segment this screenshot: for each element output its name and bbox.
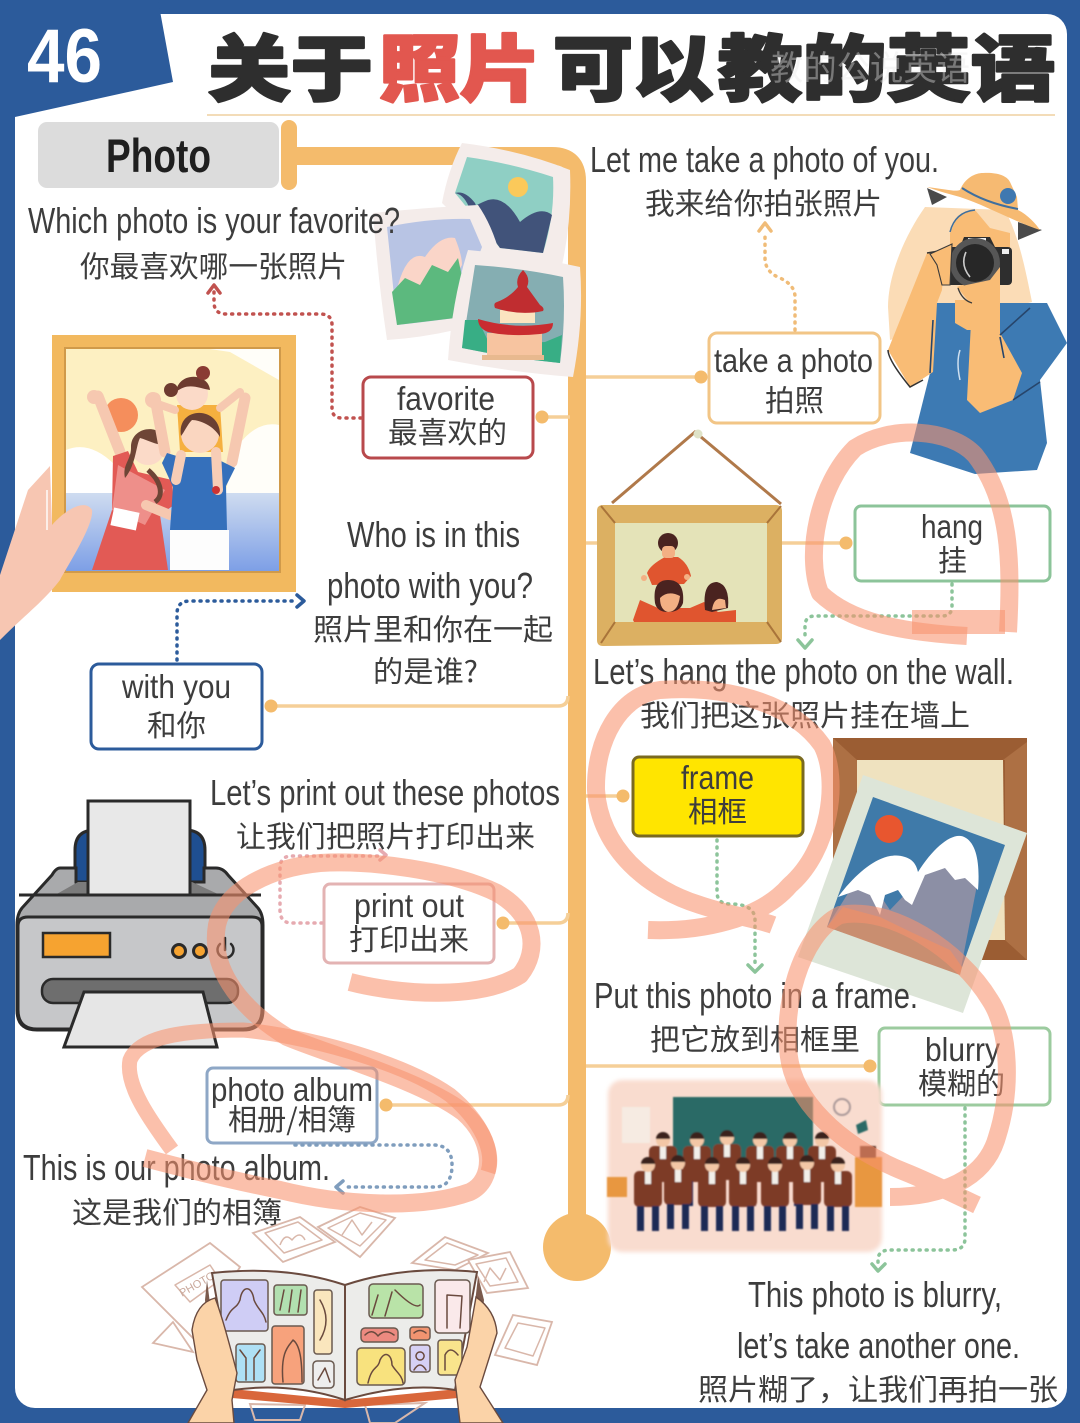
callout: print out: print out bbox=[354, 887, 464, 924]
title bbox=[208, 11, 1055, 116]
text: Let's print out bbox=[210, 772, 560, 856]
highlight scribble: print out and album bbox=[129, 862, 532, 1204]
text: Who is in this photo: photo with you? bbox=[327, 565, 533, 606]
title: 照片 bbox=[379, 11, 541, 116]
callout: photo album: 相册/相簿 bbox=[228, 1097, 356, 1139]
camera bbox=[942, 237, 1012, 288]
text: This is our photo album bbox=[23, 1147, 330, 1232]
callout: favorite: favorite bbox=[397, 380, 495, 417]
arrow: take a photo to sentence bbox=[759, 223, 795, 330]
illustration: blurry class photo bbox=[607, 1080, 882, 1252]
callout: print out bbox=[324, 884, 494, 963]
callout: with you bbox=[91, 664, 262, 749]
arrow: favorite to sentence bbox=[208, 285, 361, 418]
callout: blurry bbox=[879, 1028, 1050, 1105]
callout: frame: 相框 bbox=[688, 789, 747, 831]
callout: photo album: photo album bbox=[211, 1071, 373, 1108]
illustration: family photo with hand bbox=[0, 335, 296, 640]
illustration: printer bbox=[17, 801, 263, 1047]
text: Let's print out: 让我们把照片打印出来 bbox=[236, 814, 535, 856]
callout: hang: hang bbox=[921, 508, 983, 545]
central timeline trunk bbox=[281, 120, 611, 1281]
heading: Photo: Photo bbox=[106, 129, 211, 182]
callout: hang bbox=[855, 506, 1050, 581]
highlight scribble: hang bbox=[814, 433, 1009, 636]
illustration: wooden frame bbox=[833, 738, 1027, 960]
text: Put this photo in a frame: Put this photo in a frame. bbox=[594, 975, 918, 1016]
illustration: stack of photos bbox=[373, 143, 581, 377]
text: This photo is blurry: 照片糊了，让我们再拍一张 bbox=[698, 1367, 1058, 1409]
text: Let me take a photo bbox=[590, 139, 939, 223]
illustration: hanging framed picture bbox=[597, 430, 782, 646]
branch connectors bbox=[264, 370, 876, 1112]
text: Which photo: 你最喜欢哪一张照片 bbox=[80, 244, 347, 286]
arrow: with you to sentence bbox=[177, 595, 304, 660]
text: Who is in this photo: 照片里和你在一起 bbox=[313, 607, 553, 649]
highlight scribble: frame bbox=[596, 689, 831, 930]
text: This is our photo album: This is our photo album. bbox=[23, 1147, 330, 1188]
text: Let's hang the photo bbox=[593, 651, 1014, 735]
hand bbox=[0, 466, 92, 640]
callout: frame: frame bbox=[681, 759, 754, 796]
text: Let's print out: Let’s print out these photos bbox=[210, 772, 560, 813]
text: Who is in this photo: Who is in this bbox=[347, 514, 520, 555]
text: Let me take a photo: 我来给你拍张照片 bbox=[645, 181, 882, 223]
illustration: woman with camera bbox=[888, 173, 1067, 474]
text: This is our photo album: 这是我们的相簿 bbox=[72, 1190, 282, 1232]
text: Put this photo in a frame bbox=[594, 975, 918, 1059]
text: This photo is blurry: let’s take another one. bbox=[737, 1325, 1020, 1366]
number tab bbox=[0, 0, 173, 140]
callout: favorite bbox=[363, 377, 533, 458]
arrow: print out to sentence bbox=[280, 850, 386, 923]
title: 可以 bbox=[553, 11, 713, 116]
heading: Photo bbox=[38, 122, 279, 188]
hands bbox=[188, 1298, 237, 1423]
man and child bbox=[145, 366, 245, 570]
sun hat bbox=[927, 173, 1042, 240]
arrow: frame to sentence bbox=[717, 840, 762, 972]
text: Who is in this photo: 的是谁? bbox=[373, 649, 478, 691]
callout: frame bbox=[633, 757, 803, 836]
callout: hang: 挂 bbox=[938, 538, 967, 580]
title: 关于 bbox=[208, 11, 373, 116]
callout: with you: with you bbox=[121, 668, 231, 705]
woman bbox=[87, 390, 174, 570]
callout: take a photo bbox=[709, 333, 880, 423]
illustration: photo album with hands bbox=[142, 1207, 552, 1423]
text: Put this photo in a frame: 把它放到相框里 bbox=[650, 1017, 860, 1059]
text: Which photo bbox=[28, 200, 400, 286]
highlight scribble: blurry bbox=[787, 914, 1007, 1205]
illustration: photo album with hands: PHOTO bbox=[178, 1270, 218, 1300]
callout: blurry: 模糊的 bbox=[918, 1061, 1005, 1103]
arrow: hang to sentence bbox=[798, 584, 952, 648]
arrow: album to sentence bbox=[295, 1145, 452, 1193]
callout: print out: 打印出来 bbox=[349, 917, 469, 959]
title watermark: 教的公说英语 bbox=[770, 41, 970, 90]
arrow: blurry to sentence bbox=[872, 1108, 965, 1271]
text: Who is in this photo bbox=[313, 514, 553, 691]
callout: with you: 和你 bbox=[147, 703, 206, 745]
episode number: 46 bbox=[27, 14, 102, 99]
callout: take a photo: 拍照 bbox=[765, 378, 824, 420]
callout: take a photo: take a photo bbox=[714, 342, 873, 379]
album snapshots bbox=[221, 1280, 470, 1388]
illustration: polaroid with mountains bbox=[798, 775, 1027, 1013]
text: This photo is blurry: This photo is blurry, bbox=[748, 1274, 1002, 1315]
callout: favorite: 最喜欢的 bbox=[388, 410, 507, 452]
text: This photo is blurry bbox=[698, 1274, 1058, 1409]
text: Which photo: Which photo is your favorite? bbox=[28, 200, 400, 241]
title: 教的英语 bbox=[718, 11, 1055, 116]
callout: blurry: blurry bbox=[925, 1031, 1000, 1068]
text: Let's hang the photo: 我们把这张照片挂在墙上 bbox=[640, 693, 970, 735]
callout: photo album bbox=[207, 1068, 377, 1143]
text: Let me take a photo: Let me take a photo of you. bbox=[590, 139, 939, 180]
